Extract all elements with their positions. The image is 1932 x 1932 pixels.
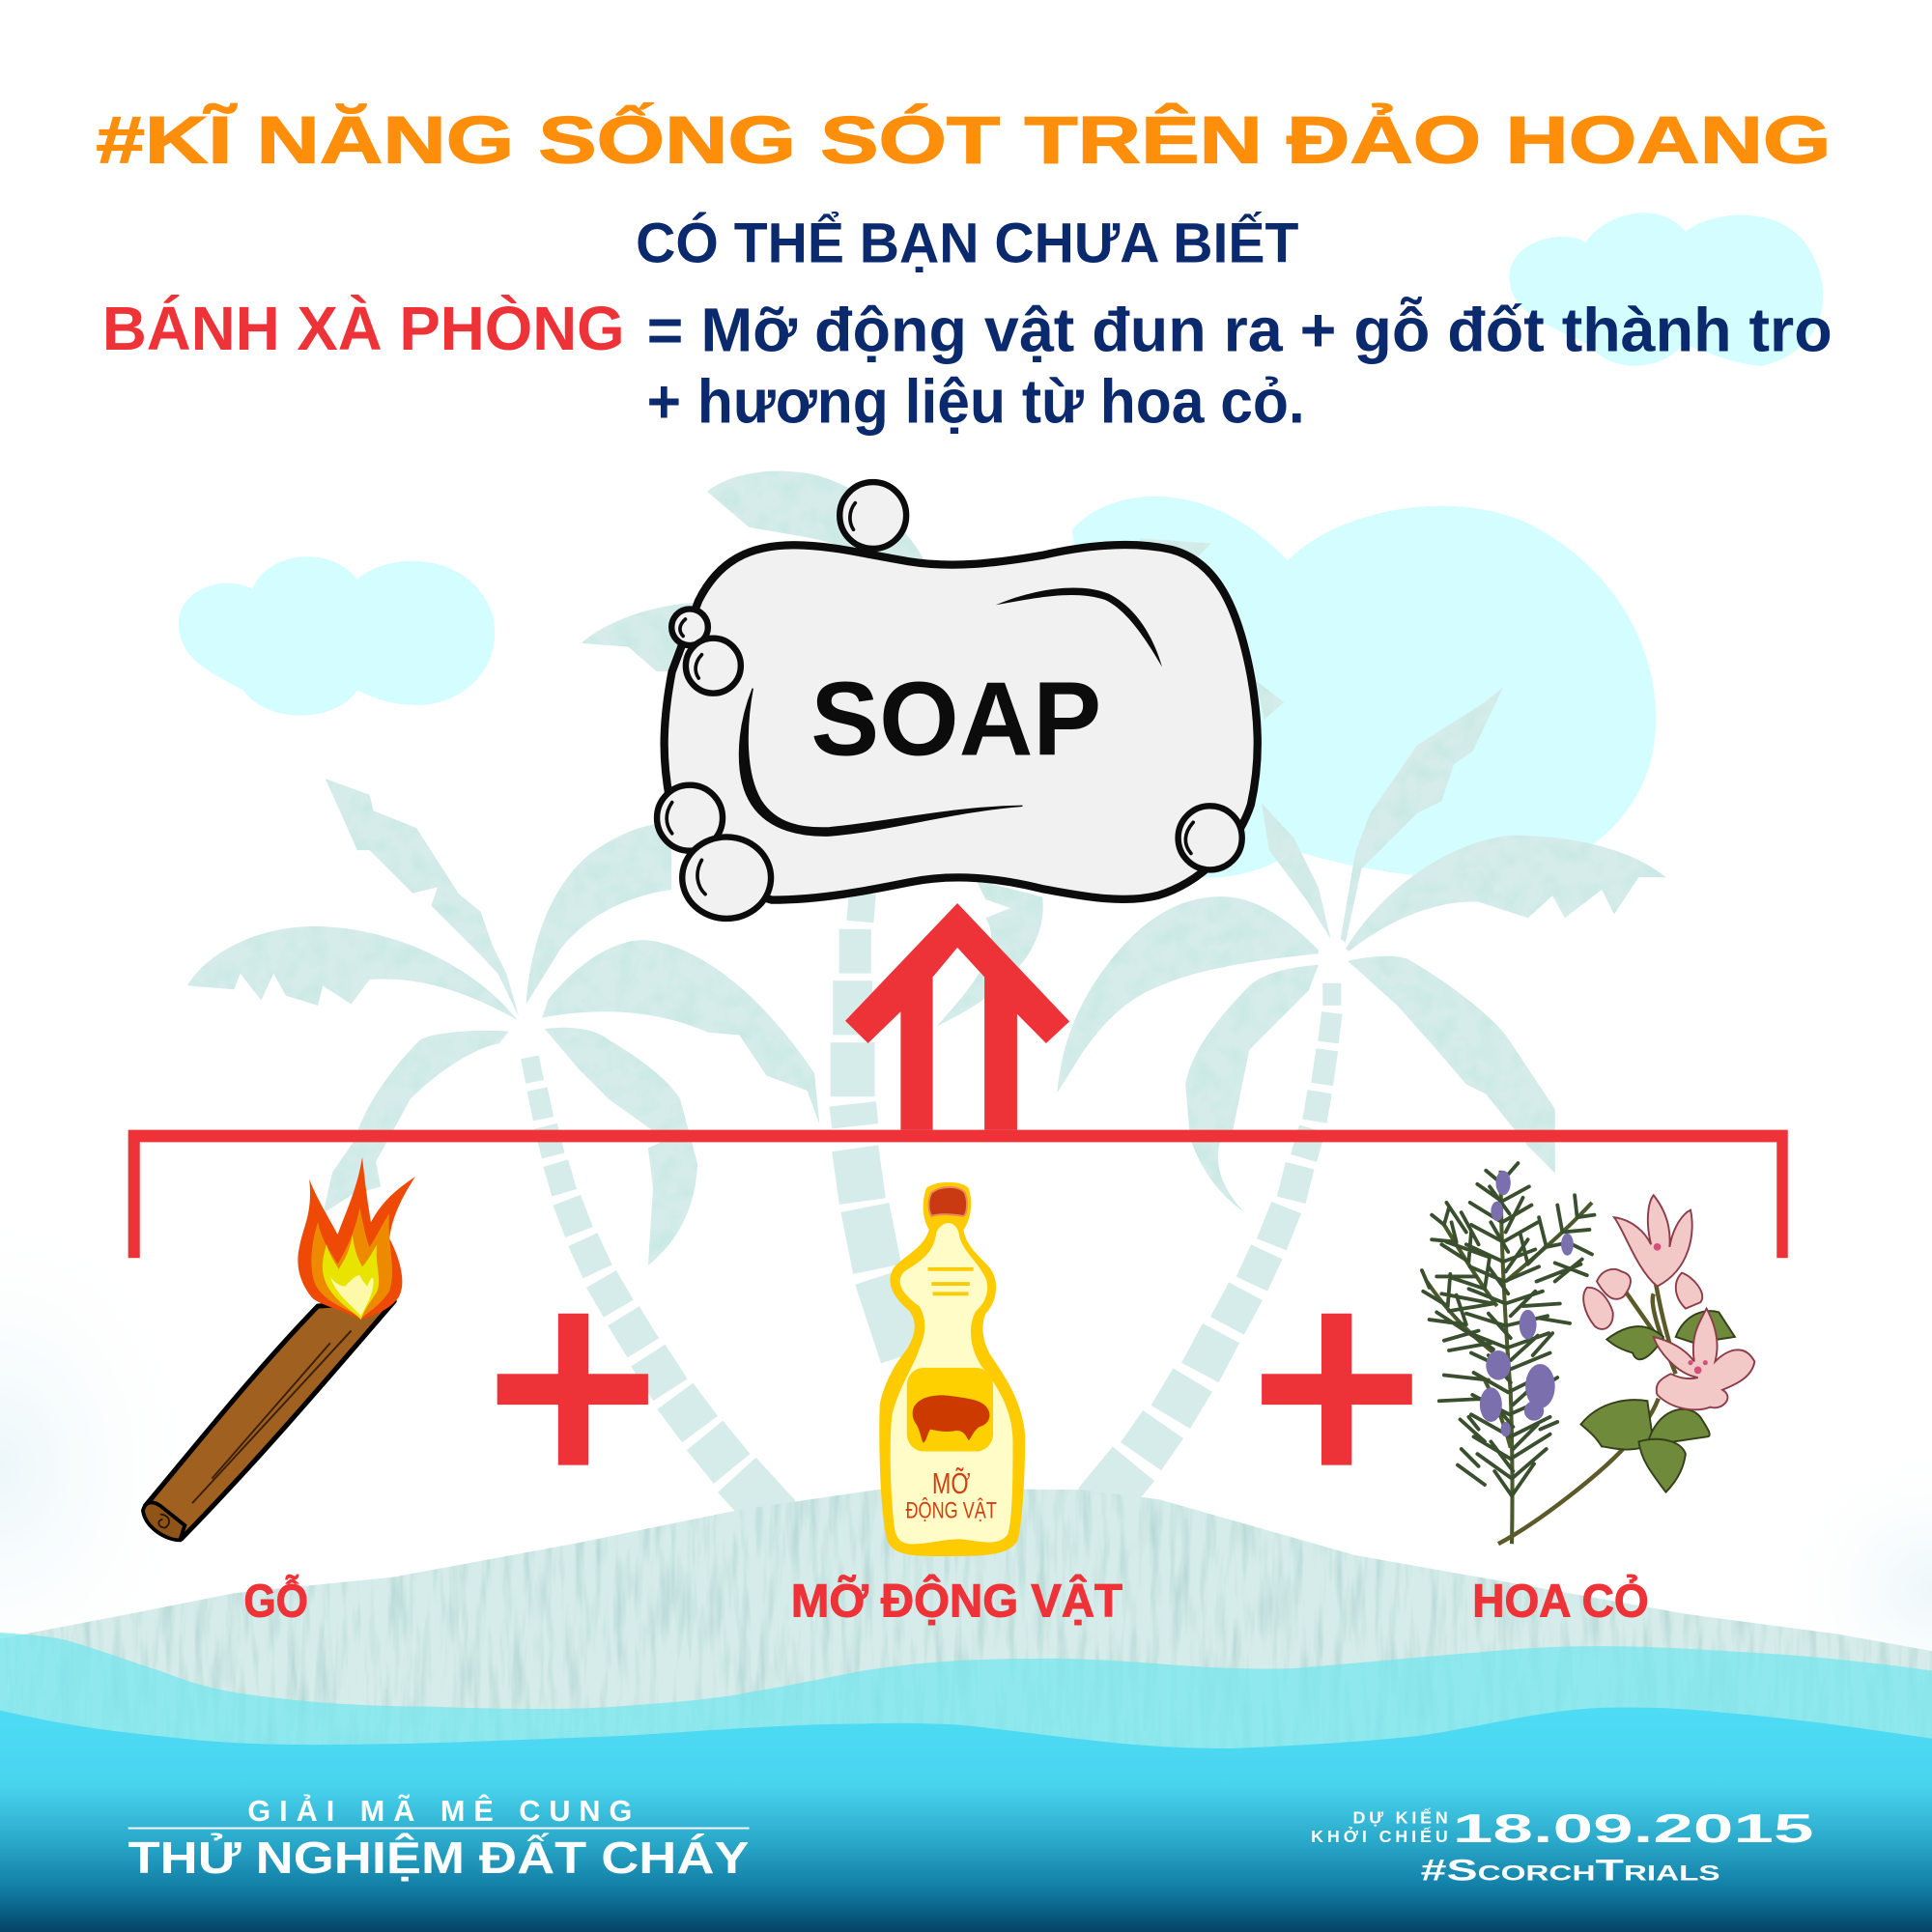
bracket — [128, 1130, 1788, 1258]
torch end — [143, 1502, 185, 1540]
bottle text ĐỘNG VẬT: ĐỘNG VẬT — [906, 1496, 997, 1523]
pink flowers — [1583, 1195, 1754, 1409]
leaves — [1580, 1311, 1735, 1492]
palm: left fronds — [187, 779, 819, 1265]
flame core — [330, 1275, 374, 1316]
flame yellow — [323, 1235, 379, 1320]
soap label: BÁNH XÀ PHÒNG — [102, 294, 625, 363]
movie title bottom: THỬ NGHIỆM ĐẤT CHÁY — [128, 1833, 750, 1883]
shallow water — [0, 1633, 1932, 1786]
flame middle — [311, 1208, 392, 1319]
soap highlight lower — [739, 689, 1022, 836]
release date block — [1311, 1805, 1814, 1887]
rosemary needles — [1422, 1163, 1595, 1495]
formula line 1: = Mỡ động vật đun ra + gỗ đốt thành tro — [647, 296, 1833, 365]
bottle body — [879, 1182, 1025, 1556]
bottle ridges — [927, 1269, 974, 1293]
label: animal fat: MỠ ĐỘNG VẬT — [791, 1574, 1122, 1627]
soap highlight upper — [996, 588, 1162, 668]
cloud: left — [179, 556, 495, 716]
icon: animal fat bottle — [879, 1182, 1025, 1556]
icon: soap bar — [657, 482, 1258, 919]
title: #KĨ NĂNG SỐNG SÓT TRÊN ĐẢO HOANG — [96, 102, 1831, 177]
movie title top: GIẢI MÃ MÊ CUNG — [247, 1793, 632, 1828]
plus sign left — [497, 1314, 648, 1465]
palm: middle trunk — [853, 894, 906, 1355]
arrow: up to soap — [845, 903, 1069, 1130]
hashtag: #ScorchTrials — [1421, 1852, 1720, 1887]
release date: 18.09.2015 — [1453, 1805, 1814, 1851]
icon: herbs and flowers — [1422, 1163, 1754, 1544]
torch stick — [146, 1301, 394, 1539]
bottle label — [907, 1368, 993, 1452]
plus sign right — [1262, 1314, 1412, 1465]
cloud: top right — [1509, 213, 1823, 366]
bubble shines — [667, 503, 1193, 895]
rosemary stems — [1427, 1171, 1592, 1544]
soap body — [665, 545, 1258, 900]
release caption line 1: DỰ KIẾN — [1353, 1807, 1448, 1828]
movie logo — [128, 1793, 750, 1883]
flame outer — [298, 1157, 415, 1320]
palm: middle fronds — [582, 471, 1284, 1026]
flower centers — [1654, 1243, 1708, 1374]
subtitle: CÓ THỂ BẠN CHƯA BIẾT — [636, 212, 1299, 275]
cloud: large behind soap — [1072, 497, 1656, 878]
logo rule — [128, 1828, 750, 1829]
palm: left trunk — [529, 1057, 777, 1518]
palm: right trunk — [1099, 983, 1332, 1506]
pig — [913, 1395, 989, 1443]
bubbles — [657, 482, 1242, 919]
label: wood: GỖ — [244, 1574, 308, 1627]
flower stems — [1498, 1257, 1676, 1544]
icon: burning wood torch — [143, 1157, 415, 1540]
bottle text MỠ: MỠ — [932, 1466, 970, 1500]
soap word: SOAP — [810, 660, 1101, 778]
wood grain — [192, 1331, 352, 1503]
lavender blossoms — [1480, 1171, 1574, 1436]
formula line 2: + hương liệu từ hoa cỏ. — [647, 366, 1305, 436]
release caption line 2: KHỞI CHIẾU — [1311, 1826, 1448, 1846]
island — [0, 1489, 1932, 1775]
soft right haze — [1772, 1441, 1932, 1737]
soft left haze — [0, 1195, 210, 1737]
palm: right fronds — [1057, 688, 1665, 1212]
bottle inner — [891, 1223, 1012, 1544]
label: flowers and herbs: HOA CỎ — [1472, 1574, 1649, 1627]
palm trees and island silhouette — [0, 471, 1932, 1775]
bottle cap — [928, 1187, 967, 1216]
deep sea — [0, 1708, 1932, 1932]
